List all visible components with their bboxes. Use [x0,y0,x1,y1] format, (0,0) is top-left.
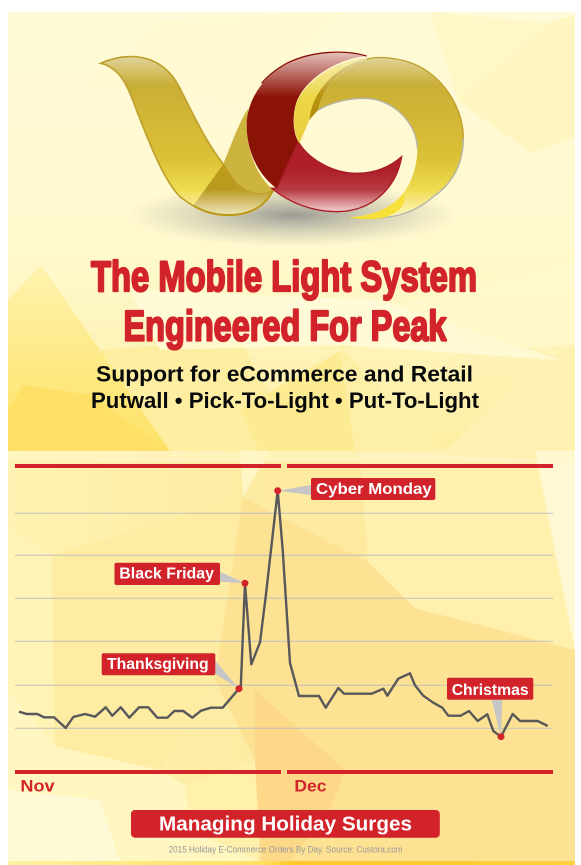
gold ring: main [318,58,463,218]
title [91,253,477,350]
gold ring: bright inner tip [347,193,404,219]
logo shadow [127,183,460,247]
bottom rule: Dec [287,770,553,774]
ribbon: overlap [193,164,273,215]
gold ring: top edge [367,58,463,138]
bottom rule: Nov [15,770,281,774]
label: Cyber Monday: Cyber Monday [316,481,432,498]
subtitle line 2: Putwall • Pick-To-Light • Put-To-Light [91,388,480,413]
source note: 2015 Holiday E-Commerce Orders By Day. Source: Custora.com [169,845,403,855]
red ring: light part [272,142,402,212]
ribbon: left leg [101,57,273,215]
gold ring: grey edges [318,98,463,218]
label: Cyber Monday [311,478,435,500]
logo [101,52,463,247]
banner: Managing Holiday Surges [131,810,440,838]
top rule: Dec [287,464,553,468]
label: Thanksgiving: Thanksgiving [107,656,209,673]
axis label: Dec: Dec [294,777,326,796]
data line [19,491,548,737]
data point markers [236,487,504,740]
label: Black Friday [114,563,220,585]
top rule: Nov [15,464,281,468]
subtitle line 1: Support for eCommerce and Retail [96,362,473,386]
ribbon: lower edge [193,190,273,215]
red ring: top edge [262,52,367,83]
background: bottom strip [8,861,575,865]
label: Christmas: Christmas [452,682,529,699]
gold ring: crescent [294,57,367,143]
red ring: dark part [247,52,367,188]
ribbon: right leg [193,108,273,215]
label: Black Friday: Black Friday [119,565,214,582]
banner: Managing Holiday Surges: Managing Holiday Surges [159,814,412,836]
background: lower panel [8,451,575,861]
gold ring: wedge [309,58,367,120]
background: upper panel [8,12,575,451]
axis label: Nov: Nov [20,777,55,796]
title line 2: Engineered For Peak [124,302,447,350]
chart [15,464,553,796]
subtitle [91,362,480,413]
callout pointers [215,485,502,737]
